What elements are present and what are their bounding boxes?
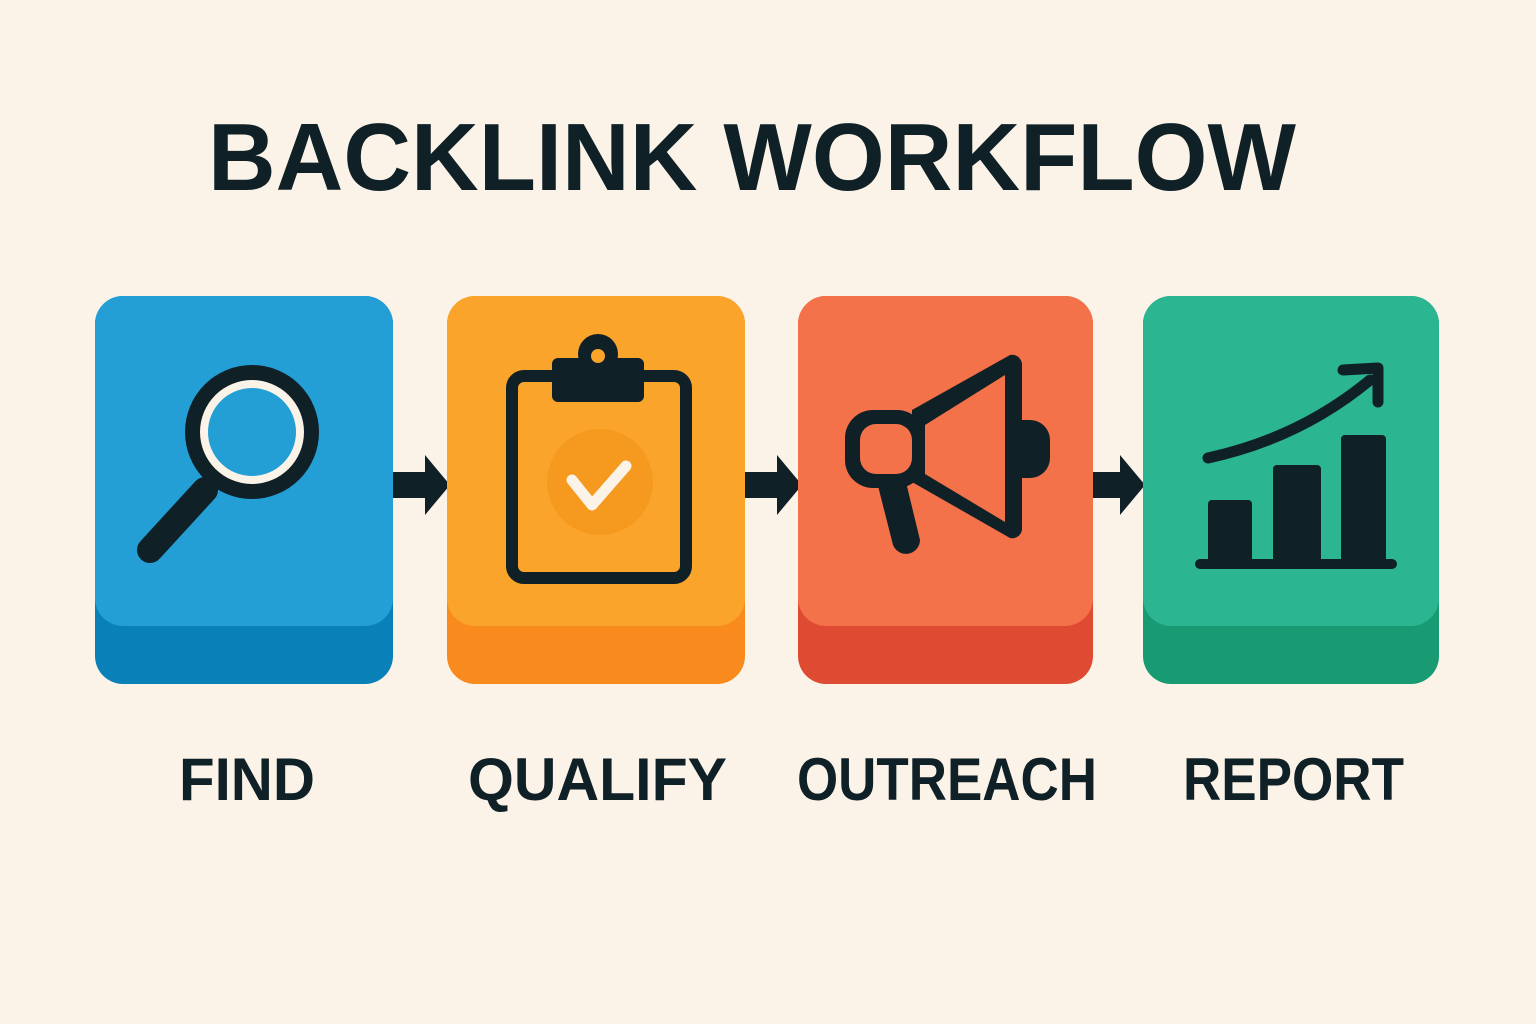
- label: report: REPORT: [1183, 746, 1404, 813]
- card: outreach: [798, 296, 1093, 684]
- card: qualify: [447, 296, 745, 684]
- label: outreach: OUTREACH: [797, 746, 1097, 813]
- arrow 1: [393, 455, 450, 515]
- title: BACKLINK WORKFLOW: [208, 104, 1296, 211]
- arrow 2: [745, 455, 802, 515]
- label: find: FIND: [179, 746, 315, 813]
- label: qualify: QUALIFY: [468, 746, 727, 813]
- icon: megaphone: [845, 355, 1050, 554]
- arrow 3: [1093, 455, 1145, 515]
- card: find: [95, 296, 393, 684]
- icon: magnifying glass: [150, 365, 319, 550]
- icon: clipboard check: [512, 334, 686, 578]
- icon: growth chart: [1200, 368, 1392, 564]
- card: report: [1143, 296, 1439, 684]
